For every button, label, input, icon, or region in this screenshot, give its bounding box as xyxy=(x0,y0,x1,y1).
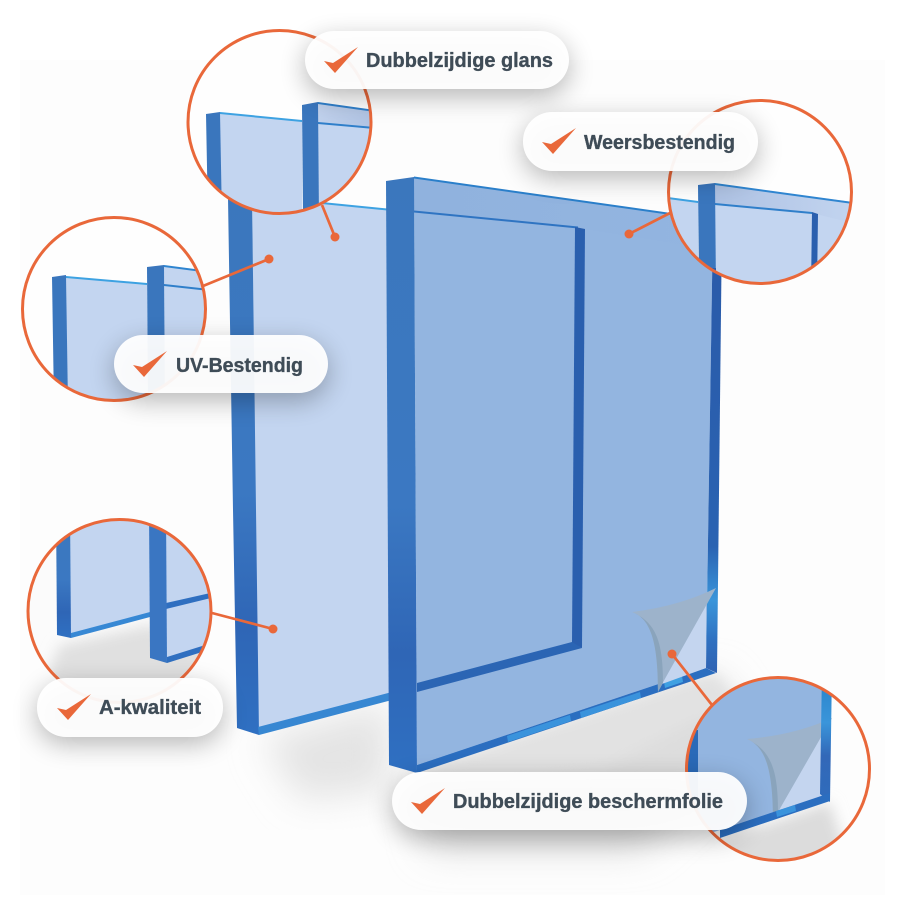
icon: check xyxy=(411,788,445,814)
icon: check xyxy=(324,47,358,73)
connector: beschermfolie xyxy=(668,650,712,705)
label: dubbelzijdige glans xyxy=(305,31,569,97)
front sheet right edge xyxy=(706,220,722,673)
magnifier: dubbelzijdige glans xyxy=(186,29,372,215)
back sheet top rim xyxy=(252,195,392,211)
magnifier: A-kwaliteit xyxy=(26,518,212,704)
front sheet top strip xyxy=(414,178,713,250)
label: dubbelzijdige glans: Dubbelzijdige glans xyxy=(366,50,553,72)
label: dubbelzijdige beschermfolie: Dubbelzijdige beschermfolie xyxy=(453,791,723,813)
front sheet bottom rim xyxy=(417,668,716,773)
label: dubbelzijdige beschermfolie xyxy=(392,772,747,838)
front sheet top rim xyxy=(414,176,713,221)
label: A-kwaliteit: A-kwaliteit xyxy=(99,697,201,719)
icon: check xyxy=(542,128,576,154)
connector: glans xyxy=(322,205,340,242)
front sheet face xyxy=(414,178,713,765)
label: weersbestendig: Weersbestendig xyxy=(584,132,735,154)
icon: check xyxy=(57,694,91,720)
magnifier: beschermfolie xyxy=(685,676,871,862)
foil fold xyxy=(632,588,716,692)
label: weersbestendig xyxy=(523,112,758,178)
front sheet inner top line xyxy=(414,210,578,228)
front sheet inner bottom band xyxy=(417,642,582,692)
foil crease xyxy=(632,612,663,692)
icon: check xyxy=(133,351,167,377)
label: A-kwaliteit xyxy=(37,678,223,744)
back acrylic sheet xyxy=(228,195,392,735)
connector: A-kwaliteit xyxy=(212,613,278,634)
back sheet face xyxy=(252,196,392,728)
label: UV-bestendig xyxy=(114,335,328,401)
connector: weersbestendig xyxy=(624,213,670,238)
front acrylic sheet xyxy=(386,176,722,773)
floor shadows xyxy=(262,673,760,850)
magnifier: UV-bestendig xyxy=(21,216,207,402)
connector: UV xyxy=(203,254,274,286)
exposed light triangle xyxy=(662,603,706,684)
front sheet left edge xyxy=(386,177,417,773)
front sheet inner right band xyxy=(572,227,585,648)
connector lines xyxy=(203,205,712,705)
back sheet side edge xyxy=(228,196,259,735)
magnifier: weersbestendig xyxy=(667,99,853,285)
peeled foil corner xyxy=(632,588,716,692)
back sheet bottom rim xyxy=(258,692,392,735)
label: UV-bestendig: UV-Bestendig xyxy=(176,355,303,377)
